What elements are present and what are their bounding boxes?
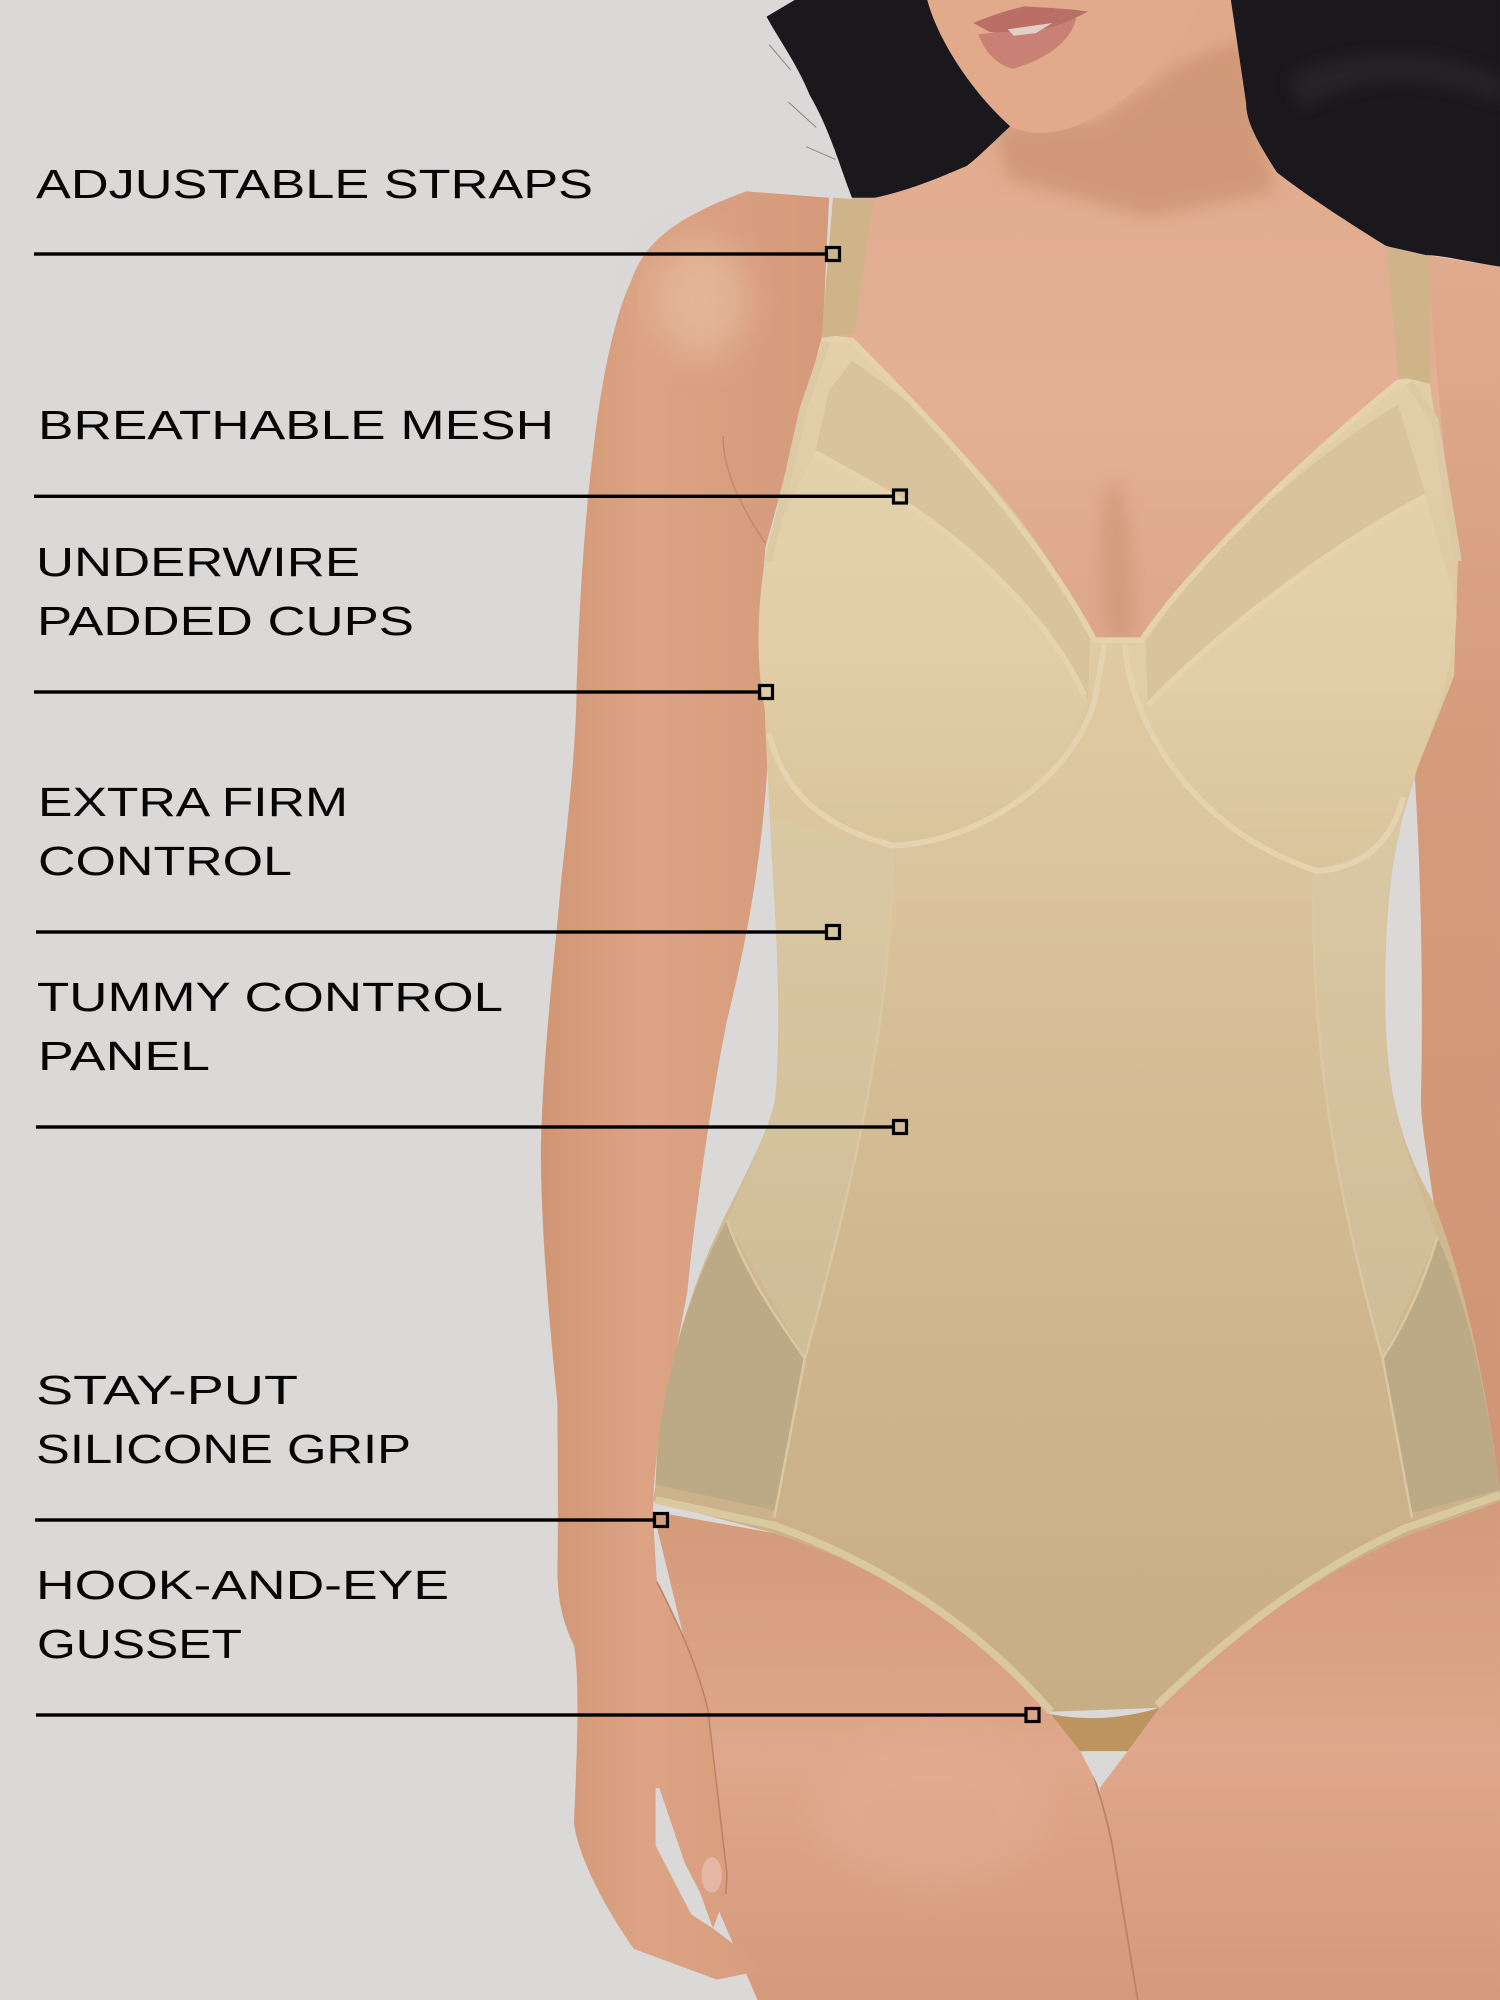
thigh highlight	[816, 1735, 1046, 1888]
right hip mesh panel	[1383, 1237, 1500, 1513]
callout: extra firm control: CONTROL	[38, 838, 292, 884]
bodysuit base	[653, 334, 1500, 1712]
callout: tummy control panel: TUMMY CONTROL	[37, 974, 503, 1020]
callout: underwire padded cups: PADDED CUPS	[37, 598, 414, 644]
crotch gap	[1080, 1751, 1128, 1788]
face	[927, 0, 1203, 133]
callout: breathable mesh	[34, 402, 906, 503]
callout: hook-and-eye gusset	[36, 1562, 1039, 1722]
thigh divider	[1087, 1754, 1138, 2000]
left hip mesh panel	[656, 1221, 805, 1510]
fingernail	[702, 1857, 722, 1893]
right cup	[1125, 404, 1456, 867]
hair right	[1231, 0, 1500, 267]
callout: underwire padded cups	[34, 539, 772, 698]
panel seams	[727, 852, 1437, 1518]
cup seams and underwire bands	[769, 338, 1429, 871]
shoulder highlight	[656, 242, 747, 357]
callout: adjustable straps	[34, 161, 840, 260]
photo: model wearing shaping bodysuit	[541, 0, 1500, 2000]
right strap	[1386, 246, 1430, 384]
armpit crease	[723, 436, 765, 543]
leg band	[656, 1495, 1500, 1712]
hair wisps	[769, 45, 835, 159]
neck shadow	[995, 38, 1276, 217]
gap between palm and finger	[656, 1788, 713, 1929]
callout: stay-put silicone grip: STAY-PUT	[36, 1367, 298, 1413]
callout: hook-and-eye gusset: HOOK-AND-EYE	[36, 1562, 449, 1608]
callout: breathable mesh: BREATHABLE MESH	[38, 402, 554, 448]
right side panel	[1313, 829, 1437, 1358]
callout: underwire padded cups: UNDERWIRE	[36, 539, 360, 585]
left thigh	[653, 1511, 1138, 2000]
waist gap left	[687, 740, 778, 1291]
left strap	[821, 198, 874, 338]
hair left	[767, 0, 1010, 198]
left side panel	[727, 816, 893, 1358]
callout: extra firm control	[36, 779, 840, 938]
callout: hook-and-eye gusset: GUSSET	[37, 1621, 242, 1667]
callout: stay-put silicone grip	[35, 1367, 668, 1526]
callout: extra firm control: EXTRA FIRM	[38, 779, 348, 825]
side lace trim	[768, 342, 1458, 561]
left cup	[759, 361, 1093, 843]
callout: stay-put silicone grip: SILICONE GRIP	[36, 1426, 411, 1472]
callout: tummy control panel: PANEL	[38, 1033, 210, 1079]
finger edge	[657, 1582, 727, 1894]
gusset	[1051, 1708, 1159, 1751]
left arm and hand	[541, 191, 829, 1980]
right thigh	[1099, 1501, 1500, 2000]
callout: tummy control panel	[36, 974, 906, 1134]
callout: adjustable straps: ADJUSTABLE STRAPS	[36, 161, 593, 207]
right mesh panel	[1145, 404, 1426, 705]
hair highlight	[1288, 54, 1500, 108]
neck, chest and face skin	[761, 0, 1500, 816]
left mesh panel	[815, 361, 1091, 700]
lips	[973, 6, 1088, 69]
right arm	[1415, 255, 1500, 1490]
cleavage shadow	[1100, 485, 1135, 638]
